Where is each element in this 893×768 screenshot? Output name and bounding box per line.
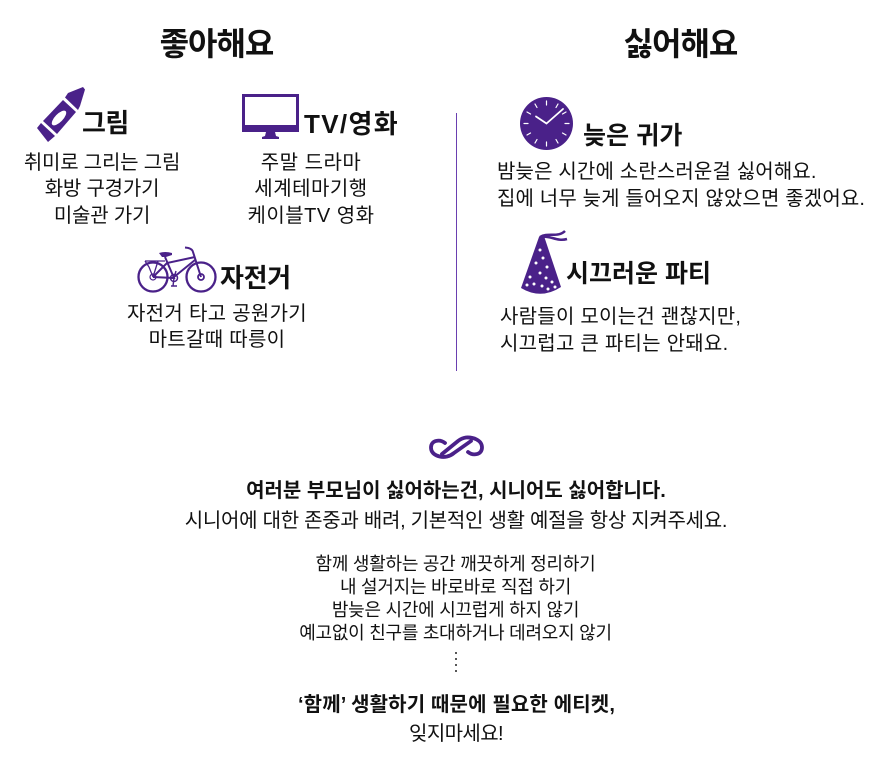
text: tv list: 케이블TV 영화 — [247, 204, 375, 226]
text: late return description: 밤늦은 시간에 소란스러운걸 싫어해요. — [497, 161, 817, 183]
text: noisy party description: 시끄럽고 큰 파티는 안돼요. — [500, 332, 728, 354]
heading: drawing: 그림 — [82, 108, 129, 138]
text: etiquette list: 밤늦은 시간에 시끄럽게 하지 않기 — [332, 600, 579, 620]
text: etiquette list: 함께 생활하는 공간 깨끗하게 정리하기 — [316, 554, 595, 574]
heading: late return: 늦은 귀가 — [583, 122, 682, 150]
text: etiquette list: 내 설거지는 바로바로 직접 하기 — [340, 577, 571, 597]
divider line — [456, 113, 457, 371]
text: bicycle list — [127, 302, 307, 351]
icon: clock — [520, 97, 573, 150]
text: closing bold: ‘함께’ 생활하기 때문에 필요한 에티켓, — [298, 694, 615, 716]
text: bicycle list: 자전거 타고 공원가기 — [127, 302, 307, 324]
text: noisy party description: 사람들이 모이는건 괜찮지만, — [500, 306, 741, 328]
text: noisy party description — [500, 306, 741, 354]
text: tv list — [247, 152, 375, 226]
text: tv list: 주말 드라마 — [261, 152, 361, 174]
text: tv list: 세계테마기행 — [254, 178, 368, 200]
heading: noisy party: 시끄러운 파티 — [566, 260, 711, 288]
icon: linked loop logo — [429, 436, 484, 459]
heading: bicycle: 자전거 — [220, 263, 291, 293]
icon: television — [242, 94, 299, 139]
icon: party hat — [521, 230, 568, 294]
icon: vertical dots — [455, 652, 457, 672]
text: late return description — [497, 161, 865, 210]
text: summary bold: 여러분 부모님이 싫어하는건, 시니어도 싫어합니다. — [246, 480, 666, 502]
heading: likes: 좋아해요 — [160, 26, 273, 62]
text: late return description: 집에 너무 늦게 들어오지 않았으면 좋겠어요. — [497, 188, 865, 210]
text: summary regular: 시니어에 대한 존중과 배려, 기본적인 생활 예절을 항상 지켜주세요. — [185, 510, 727, 532]
text: drawing list: 미술관 가기 — [54, 204, 150, 226]
text: etiquette list: 예고없이 친구를 초대하거나 데려오지 않기 — [299, 623, 612, 643]
icon: bicycle — [137, 246, 217, 293]
text: drawing list: 화방 구경가기 — [45, 178, 159, 200]
heading: tv and movies: TV/영화 — [304, 109, 399, 139]
icon: crayon — [37, 87, 85, 142]
text: bicycle list: 마트갈때 따릉이 — [149, 329, 285, 351]
text: drawing list: 취미로 그리는 그림 — [24, 152, 180, 174]
heading: dislikes: 싫어해요 — [624, 26, 737, 62]
text: drawing list — [24, 152, 180, 226]
text: closing regular: 잊지마세요! — [409, 723, 503, 745]
text: etiquette list — [299, 554, 612, 643]
